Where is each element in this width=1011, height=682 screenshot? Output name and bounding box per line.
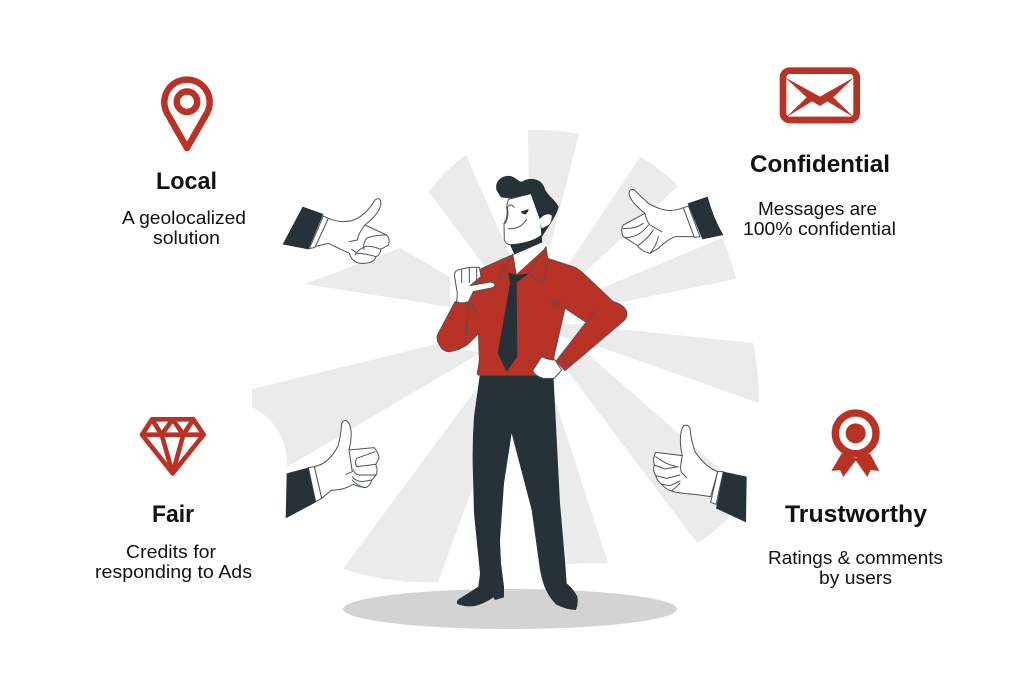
text: Credits for responding to Ads: responding to Ads bbox=[95, 562, 252, 582]
heading: Fair: Fair bbox=[152, 501, 194, 528]
pointing hand fingers bbox=[462, 268, 477, 283]
text: Messages are 100% confidential: Messages are bbox=[758, 199, 877, 219]
heading: Local: Local bbox=[156, 168, 217, 195]
ear bbox=[539, 214, 552, 228]
trousers and shoes bbox=[457, 373, 578, 610]
thumbs up: upper right bbox=[622, 189, 723, 253]
icon: award ribbon bbox=[831, 413, 879, 477]
upper body bbox=[437, 176, 627, 378]
pointing hand bbox=[454, 267, 495, 303]
text: Credits for responding to Ads bbox=[95, 542, 252, 582]
icon: diamond bbox=[142, 419, 204, 473]
text: A geolocalized solution: A geolocalized bbox=[122, 208, 246, 228]
collar bbox=[498, 247, 548, 283]
text: A geolocalized solution bbox=[122, 208, 246, 248]
background sunburst rays bbox=[252, 130, 759, 582]
white collar opening bbox=[513, 243, 546, 274]
head bbox=[504, 193, 542, 245]
text: Messages are 100% confidential: 100% confidential bbox=[743, 219, 896, 239]
block: Local bbox=[122, 80, 246, 248]
thumbs up: lower right bbox=[654, 425, 747, 522]
icon: map pin bbox=[164, 80, 210, 148]
hip hand bbox=[533, 357, 562, 378]
text: Ratings and comments by users bbox=[768, 548, 943, 588]
block: Trustworthy bbox=[768, 413, 943, 588]
neck shadow bbox=[510, 235, 543, 256]
hair bbox=[496, 176, 559, 237]
heading: Confidential: Confidential bbox=[750, 151, 890, 178]
shirt bbox=[437, 247, 627, 375]
text: Ratings and comments by users: by users bbox=[819, 568, 892, 588]
tie bbox=[498, 273, 529, 372]
text: Credits for responding to Ads: Credits for bbox=[126, 542, 216, 562]
text: Messages are 100% confidential bbox=[743, 199, 896, 239]
ground shadow bbox=[343, 589, 677, 629]
block: Confidential bbox=[743, 71, 896, 239]
text: Ratings and comments by users: Ratings & comments bbox=[768, 548, 943, 568]
block: Fair bbox=[95, 419, 252, 582]
icon: envelope bbox=[783, 71, 857, 120]
heading: Trustworthy: Trustworthy bbox=[785, 501, 928, 528]
person bbox=[437, 176, 627, 610]
shirt fold lines bbox=[466, 300, 597, 366]
text: A geolocalized solution: solution bbox=[153, 228, 220, 248]
thumbs up: lower left bbox=[286, 420, 379, 518]
thumbs up: upper left bbox=[283, 199, 389, 263]
face details bbox=[505, 205, 527, 229]
